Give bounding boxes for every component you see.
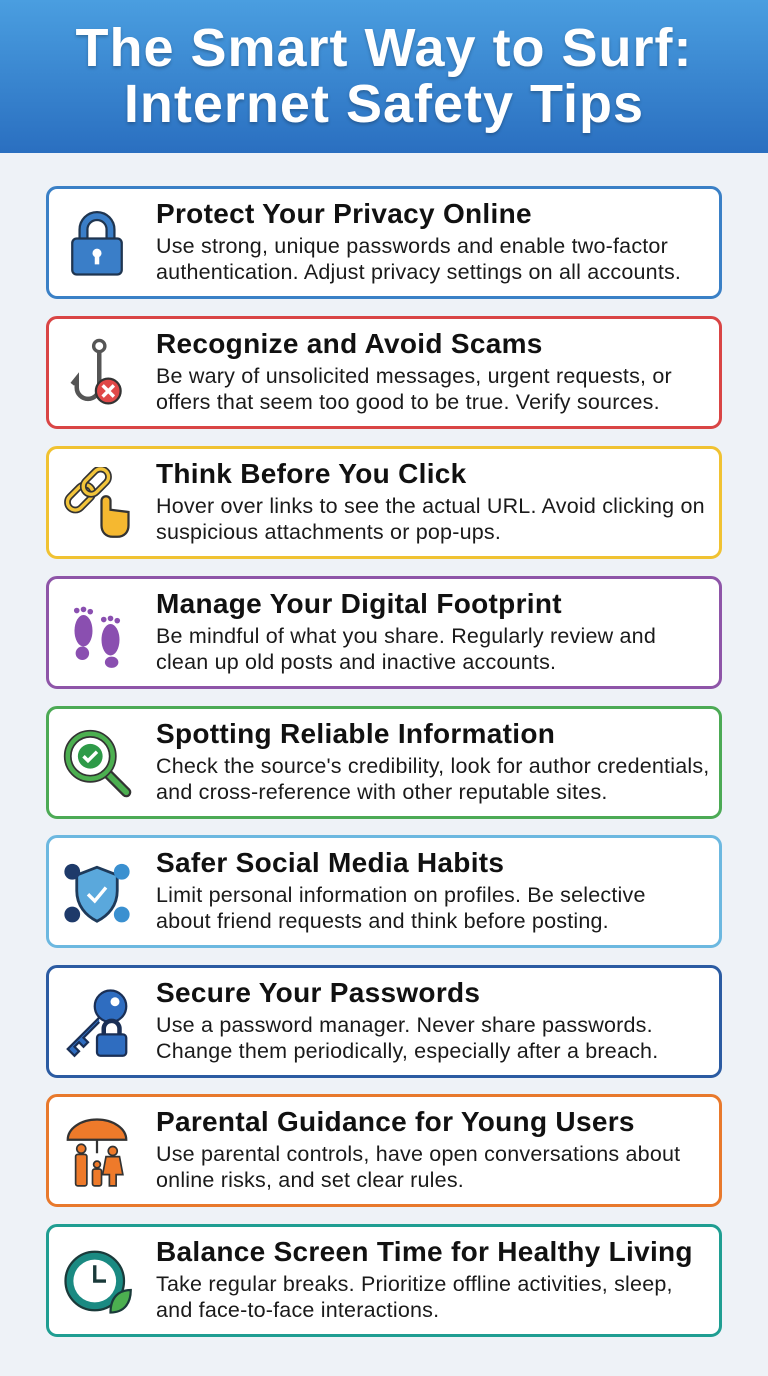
panel: reliable information <box>46 706 722 819</box>
icon: clock with leaf <box>64 1250 132 1314</box>
text <box>156 234 681 284</box>
icon: shield with social icons <box>64 864 130 923</box>
text: Change them periodically, especially after a breach. <box>156 1039 658 1063</box>
text: online risks, and set clear rules. <box>156 1168 464 1192</box>
panel: click <box>46 446 722 559</box>
icon: hook with x <box>70 338 122 404</box>
text: clean up old posts and inactive accounts. <box>156 650 556 674</box>
heading: Parental Guidance for Young Users <box>156 1106 635 1137</box>
heading: Safer Social Media Habits <box>156 847 504 878</box>
icon: padlock <box>71 211 123 276</box>
text: Hover over links to see the actual URL. Avoid clicking on <box>156 494 705 518</box>
heading: Think Before You Click <box>156 458 467 489</box>
text: authentication. Adjust privacy settings on all accounts. <box>156 260 681 284</box>
heading: Manage Your Digital Footprint <box>156 588 562 619</box>
text <box>156 364 672 414</box>
text: Take regular breaks. Prioritize offline activities, sleep, <box>156 1272 673 1296</box>
panel: social media <box>46 835 722 948</box>
text: about friend requests and think before posting. <box>156 909 609 933</box>
icon: link and hand <box>64 467 130 538</box>
text: Limit personal information on profiles. Be selective <box>156 883 646 907</box>
text <box>156 624 656 674</box>
heading: Spotting Reliable Information <box>156 718 555 749</box>
text <box>156 1272 673 1322</box>
text <box>156 494 705 544</box>
panel: passwords <box>46 965 722 1078</box>
header banner <box>0 0 768 153</box>
text <box>156 1013 658 1063</box>
text: Use a password manager. Never share passwords. <box>156 1013 653 1037</box>
text <box>156 1142 680 1192</box>
heading: Balance Screen Time for Healthy Living <box>156 1236 693 1267</box>
text: suspicious attachments or pop-ups. <box>156 520 501 544</box>
text <box>156 754 709 804</box>
text: and face-to-face interactions. <box>156 1298 439 1322</box>
text: Be mindful of what you share. Regularly review and <box>156 624 656 648</box>
text: and cross-reference with other reputable sites. <box>156 780 608 804</box>
icon: footprints <box>74 606 120 668</box>
text <box>156 883 646 933</box>
panel: privacy <box>46 186 722 299</box>
text: Check the source's credibility, look for author credentials, <box>156 754 709 778</box>
title: The Smart Way to Surf: <box>75 18 693 78</box>
text: Be wary of unsolicited messages, urgent requests, or <box>156 364 672 388</box>
icon: umbrella family <box>66 1118 128 1187</box>
text: offers that seem too good to be true. Verify sources. <box>156 390 660 414</box>
heading: Protect Your Privacy Online <box>156 198 532 229</box>
panel: screen time <box>46 1224 722 1337</box>
panel: scams <box>46 316 722 429</box>
heading: Recognize and Avoid Scams <box>156 328 543 359</box>
heading: Secure Your Passwords <box>156 977 480 1008</box>
panel: parental guidance <box>46 1094 722 1207</box>
panel: footprint <box>46 576 722 689</box>
title: Internet Safety Tips <box>124 74 644 134</box>
icon: magnifier check <box>64 730 132 798</box>
text: Use parental controls, have open conversations about <box>156 1142 680 1166</box>
title <box>74 18 693 136</box>
text: Use strong, unique passwords and enable two-factor <box>156 234 668 258</box>
icon: key and lock <box>66 989 128 1058</box>
